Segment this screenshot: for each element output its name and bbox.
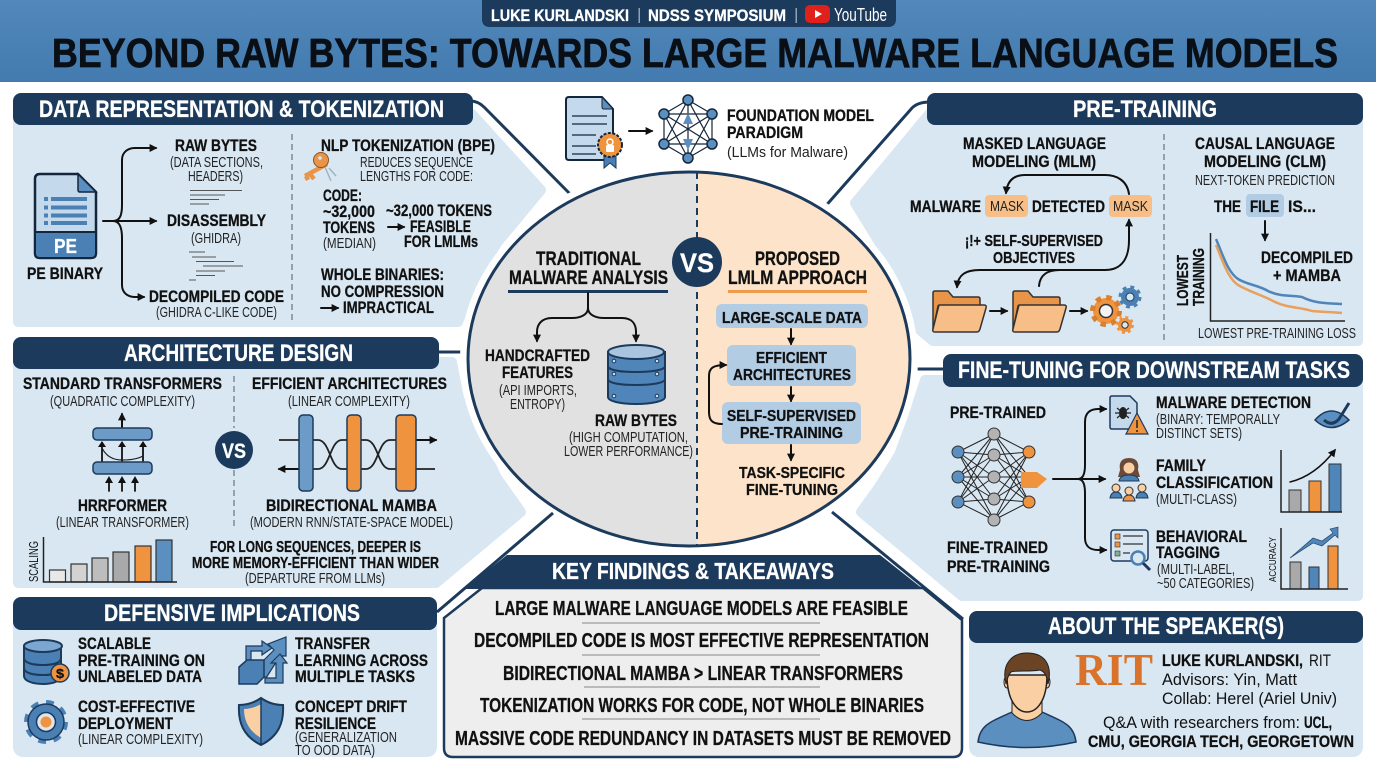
diagram: HRRFormer	[93, 414, 152, 491]
behavioral tagging text: (MULTI-LABEL,	[1157, 562, 1235, 578]
decompiled code	[149, 287, 284, 321]
NLP tokenization: NLP TOKENIZATION (BPE)	[321, 136, 495, 155]
malware detection text: DISTINCT SETS)	[1156, 426, 1242, 442]
scalable pre-training: SCALABLE	[78, 634, 151, 653]
icon: key	[305, 152, 336, 181]
label: fine-trained pre-training	[947, 538, 1050, 576]
step: efficient architectures: EFFICIENT	[756, 350, 827, 367]
raw bytes description: LOWER PERFORMANCE)	[564, 444, 693, 460]
family classification text: (MULTI-CLASS)	[1156, 492, 1237, 508]
icon: certified document	[566, 97, 622, 168]
source badge	[482, 0, 896, 27]
step: task-specific fine-tuning: FINE-TUNING	[746, 482, 838, 499]
line chart: pre-training loss	[1175, 233, 1345, 321]
label: PE binary: PE BINARY	[27, 264, 104, 283]
malware detection text: (BINARY: TEMPORALLY	[1156, 412, 1280, 428]
code snippet: disassembly	[189, 252, 243, 280]
arrow	[1264, 221, 1266, 240]
panel: key findings and takeaways	[437, 512, 963, 757]
raw bytes description: RAW BYTES	[595, 411, 677, 430]
efficient architectures: (LINEAR COMPLEXITY)	[288, 394, 410, 410]
Q and A details: UCL,	[1304, 713, 1332, 732]
speaker details: Collab: Herel (Ariel Univ)	[1162, 689, 1337, 708]
behavioral tagging text: BEHAVIORAL	[1156, 527, 1247, 546]
panel: foundation model paradigm	[566, 95, 874, 168]
finding 2: DECOMPILED CODE IS MOST EFFECTIVE REPRESENTATION	[474, 630, 929, 652]
header banner	[0, 0, 1376, 82]
behavioral tagging text	[1156, 527, 1254, 592]
Q and A details: Q&A with researchers from:	[1103, 713, 1300, 732]
icon: PE file: PE	[54, 236, 77, 258]
transfer learning text	[295, 634, 428, 686]
causal language modeling title: MODELING (CLM)	[1204, 152, 1326, 171]
note: deeper vs wider: (DEPARTURE FROM LLMs)	[245, 571, 385, 587]
self-supervised objectives: ¡!+ SELF-SUPERVISED	[965, 233, 1103, 250]
curved arrows: masking	[957, 175, 1129, 287]
note: deeper vs wider: FOR LONG SEQUENCES, DEEPER IS	[210, 539, 421, 556]
feasibility note: FOR LMLMs	[404, 232, 478, 251]
whole binaries note	[321, 265, 444, 317]
arrow	[790, 387, 792, 401]
causal language modeling title: NEXT-TOKEN PREDICTION	[1195, 173, 1335, 189]
next-token sentence: FILE	[1250, 197, 1279, 216]
concept drift resilience: TO OOD DATA)	[295, 743, 375, 759]
feasibility note: ~32,000 TOKENS	[386, 201, 492, 220]
masked sentence: MASK	[990, 199, 1024, 215]
masked sentence: DETECTED	[1032, 197, 1105, 216]
source badge: LUKE KURLANDSKI	[491, 6, 629, 25]
scalable pre-training	[78, 634, 205, 686]
transfer learning text: LEARNING ACROSS	[295, 651, 428, 670]
icon: neural network	[659, 95, 717, 163]
handcrafted features: ENTROPY)	[510, 397, 565, 413]
VS badge: VS	[222, 440, 246, 463]
icon: database and coin: $	[56, 666, 65, 681]
note: deeper vs wider	[192, 539, 439, 587]
whole binaries note: NO COMPRESSION	[321, 282, 444, 301]
cost-effective deployment: (LINEAR COMPLEXITY)	[78, 732, 203, 748]
icon: eye with brush	[1315, 403, 1349, 428]
cost-effective deployment	[78, 697, 203, 748]
self-supervised objectives: OBJECTIVES	[993, 250, 1075, 267]
heading	[969, 611, 1363, 643]
cost-effective deployment: DEPLOYMENT	[78, 714, 173, 733]
step: task-specific fine-tuning	[739, 465, 845, 499]
code token count: TOKENS	[323, 218, 375, 237]
icon: gear	[28, 704, 64, 740]
bar chart: scaling: SCALING	[26, 541, 41, 582]
whole binaries note: WHOLE BINARIES:	[321, 265, 444, 284]
label: fine-trained pre-training: FINE-TRAINED	[947, 538, 1048, 557]
label: bidirectional Mamba	[250, 496, 453, 531]
icon: behavioral tagging	[1111, 530, 1150, 570]
heading	[13, 337, 439, 369]
branching arrows	[1053, 409, 1106, 550]
connector line	[470, 101, 575, 199]
next-token sentence	[1214, 194, 1316, 217]
feasibility note	[386, 201, 492, 251]
concept drift resilience: RESILIENCE	[295, 714, 376, 733]
handcrafted features: FEATURES	[502, 363, 573, 382]
step: efficient architectures	[727, 345, 856, 386]
speaker details: Advisors: Yin, Matt	[1162, 670, 1297, 689]
step: self-supervised pre-training: SELF-SUPERVISED	[727, 408, 856, 425]
scalable pre-training: PRE-TRAINING ON	[78, 651, 205, 670]
proposed heading: PROPOSED	[755, 249, 840, 270]
raw bytes: HEADERS)	[188, 169, 243, 185]
causal language modeling title	[1195, 134, 1335, 189]
causal language modeling title: CAUSAL LANGUAGE	[1195, 134, 1335, 153]
concept drift resilience: CONCEPT DRIFT	[295, 697, 407, 716]
scalable pre-training: UNLABELED DATA	[78, 667, 202, 686]
panel: about the speakers	[969, 611, 1363, 757]
foundation model text: PARADIGM	[727, 123, 803, 142]
proposed heading: LMLM APPROACH	[728, 268, 867, 289]
speaker details	[1162, 651, 1337, 708]
decompiled plus mamba: DECOMPILED	[1261, 248, 1353, 267]
icon: shield	[239, 698, 283, 745]
next-token sentence: THE	[1214, 197, 1241, 216]
code token count	[323, 186, 376, 252]
decompiled code: (GHIDRA C-LIKE CODE)	[156, 305, 277, 321]
behavioral tagging text: ~50 CATEGORIES)	[1157, 576, 1254, 592]
decompiled code: DECOMPILED CODE	[149, 287, 284, 306]
malware detection text: MALWARE DETECTION	[1156, 393, 1311, 412]
line chart: pre-training loss: LOWEST	[1175, 255, 1192, 306]
next-token sentence: IS...	[1288, 197, 1316, 216]
step: self-supervised pre-training	[722, 402, 861, 444]
source badge: NDSS SYMPOSIUM	[648, 6, 786, 25]
VS badge	[215, 431, 253, 469]
heading	[464, 555, 923, 589]
finding 4: TOKENIZATION WORKS FOR CODE, NOT WHOLE BINARIES	[480, 695, 924, 717]
masked language modeling title: MASKED LANGUAGE	[963, 134, 1106, 153]
VS badge	[672, 237, 722, 287]
icon: family group	[1110, 458, 1148, 501]
behavioral tagging text: TAGGING	[1156, 543, 1220, 562]
malware detection text	[1156, 393, 1311, 442]
traditional heading	[508, 249, 668, 293]
self-supervised objectives	[965, 233, 1103, 267]
heading: KEY FINDINGS & TAKEAWAYS	[552, 558, 834, 584]
icons: gears	[1092, 288, 1140, 332]
arrow	[629, 130, 652, 132]
panel: defensive implications	[13, 597, 437, 759]
masked sentence: MASK	[1113, 199, 1148, 215]
foundation model text: FOUNDATION MODEL	[727, 106, 874, 125]
heading: PRE-TRAINING	[1073, 96, 1217, 123]
decompiled plus mamba	[1261, 248, 1353, 285]
raw bytes: RAW BYTES	[175, 136, 257, 155]
heading: DEFENSIVE IMPLICATIONS	[104, 600, 360, 627]
connector line	[908, 368, 945, 370]
family classification text: CLASSIFICATION	[1156, 473, 1273, 492]
panel: data representation and tokenization	[13, 93, 575, 322]
branching arrows	[103, 148, 156, 297]
code snippet: bytes	[190, 190, 242, 204]
label: bidirectional Mamba: BIDIRECTIONAL MAMBA	[266, 496, 437, 515]
connector lines	[437, 512, 963, 619]
step: self-supervised pre-training: PRE-TRAINING	[740, 425, 843, 442]
label: HRRFormer: (LINEAR TRANSFORMER)	[56, 515, 189, 531]
bar chart: family classification	[1281, 450, 1342, 512]
diagram: neural network	[952, 428, 1047, 526]
step: large-scale data: LARGE-SCALE DATA	[722, 310, 862, 327]
disassembly	[167, 211, 267, 247]
handcrafted features: HANDCRAFTED	[485, 346, 590, 365]
raw bytes	[170, 136, 263, 185]
branching arrows	[537, 293, 636, 341]
finding 5: MASSIVE CODE REDUNDANCY IN DATASETS MUST BE REMOVED	[455, 728, 951, 750]
heading: DATA REPRESENTATION & TOKENIZATION	[39, 96, 444, 123]
masked sentence: MALWARE	[910, 197, 981, 216]
label: HRRFormer: HRRFORMER	[78, 496, 167, 515]
standard transformers	[23, 374, 222, 410]
icons: folders	[933, 291, 1087, 332]
whole binaries note: IMPRACTICAL	[343, 298, 434, 317]
raw bytes description	[564, 411, 693, 460]
bar chart: scaling	[26, 537, 177, 582]
traditional heading: MALWARE ANALYSIS	[509, 268, 668, 289]
VS badge: VS	[680, 248, 714, 278]
speaker details: LUKE KURLANDSKI,	[1162, 651, 1303, 670]
heading: ABOUT THE SPEAKER(S)	[1048, 613, 1284, 640]
Q and A details	[1088, 713, 1354, 751]
masked language modeling title	[963, 134, 1106, 171]
heading	[927, 93, 1363, 125]
transfer learning text: TRANSFER	[295, 634, 370, 653]
code token count: ~32,000	[323, 202, 375, 221]
reduces sequence text	[360, 155, 473, 185]
icon: database	[608, 345, 665, 404]
foundation model text: (LLMs for Malware)	[727, 145, 848, 161]
step: large-scale data	[716, 304, 868, 328]
reduces sequence text: REDUCES SEQUENCE	[360, 155, 473, 171]
connector line	[436, 350, 473, 354]
icon: PE file	[35, 174, 96, 258]
standard transformers: STANDARD TRANSFORMERS	[23, 374, 222, 393]
speaker details: RIT	[1309, 651, 1331, 670]
handcrafted features: (API IMPORTS,	[499, 383, 577, 399]
label: bidirectional Mamba: (MODERN RNN/STATE-SPACE MODEL)	[250, 515, 453, 531]
concept drift resilience	[295, 697, 407, 759]
finding 1: LARGE MALWARE LANGUAGE MODELS ARE FEASIBLE	[495, 598, 908, 620]
foundation model text	[727, 106, 874, 161]
efficient architectures	[252, 374, 447, 410]
label: pre-trained: PRE-TRAINED	[950, 403, 1046, 422]
icon: transfer learning	[239, 637, 287, 684]
code token count: (MEDIAN)	[323, 236, 376, 252]
panel: architecture design	[13, 337, 521, 587]
logo: RIT: RIT	[1075, 644, 1153, 695]
label: HRRFormer	[56, 496, 189, 531]
standard transformers: (QUADRATIC COMPLEXITY)	[50, 394, 195, 410]
diagram: bidirectional Mamba	[279, 415, 436, 491]
feasibility note: FEASIBLE	[410, 217, 471, 236]
masked language modeling title: MODELING (MLM)	[972, 152, 1096, 171]
family classification text	[1156, 456, 1273, 508]
feedback loop arrow	[709, 365, 726, 424]
heading: ARCHITECTURE DESIGN	[124, 340, 353, 367]
transfer learning text: MULTIPLE TASKS	[295, 667, 415, 686]
decompiled plus mamba: + MAMBA	[1273, 266, 1341, 285]
heading	[13, 597, 437, 630]
raw bytes: (DATA SECTIONS,	[170, 155, 263, 171]
step: efficient architectures: ARCHITECTURES	[733, 367, 851, 384]
family classification text: FAMILY	[1156, 456, 1207, 475]
bar chart: accuracy: ACCURACY	[1267, 537, 1279, 582]
proposed heading	[728, 249, 867, 293]
panel: fine-tuning for downstream tasks	[861, 354, 1363, 596]
source badge: YouTube	[834, 5, 887, 25]
connector line	[823, 102, 930, 209]
icon: speaker portrait	[978, 653, 1076, 748]
code token count: CODE:	[323, 186, 362, 205]
central comparison oval	[467, 171, 911, 547]
panel: pre-training	[823, 93, 1363, 342]
handcrafted features	[485, 346, 590, 413]
cost-effective deployment: COST-EFFECTIVE	[78, 697, 195, 716]
efficient architectures: EFFICIENT ARCHITECTURES	[252, 374, 447, 393]
arrow	[790, 329, 792, 344]
icon: database and coin	[24, 640, 69, 684]
note: deeper vs wider: MORE MEMORY-EFFICIENT THAN WIDER	[192, 555, 439, 572]
raw bytes description: (HIGH COMPUTATION,	[569, 430, 688, 446]
disassembly: DISASSEMBLY	[167, 211, 267, 230]
disassembly: (GHIDRA)	[191, 231, 241, 247]
masked sentence	[910, 195, 1152, 217]
step: task-specific fine-tuning: TASK-SPECIFIC	[739, 465, 845, 482]
concept drift resilience: (GENERALIZATION	[295, 730, 397, 746]
icon: malware detection	[1110, 396, 1148, 434]
finding 3: BIDIRECTIONAL MAMBA > LINEAR TRANSFORMERS	[503, 663, 903, 685]
label: fine-trained pre-training: PRE-TRAINING	[947, 557, 1050, 576]
bar chart: accuracy	[1267, 527, 1348, 589]
traditional heading: TRADITIONAL	[536, 249, 641, 270]
line chart: pre-training loss: TRAINING	[1191, 248, 1208, 306]
reduces sequence text: LENGTHS FOR CODE:	[360, 169, 473, 185]
arrow	[790, 445, 792, 460]
